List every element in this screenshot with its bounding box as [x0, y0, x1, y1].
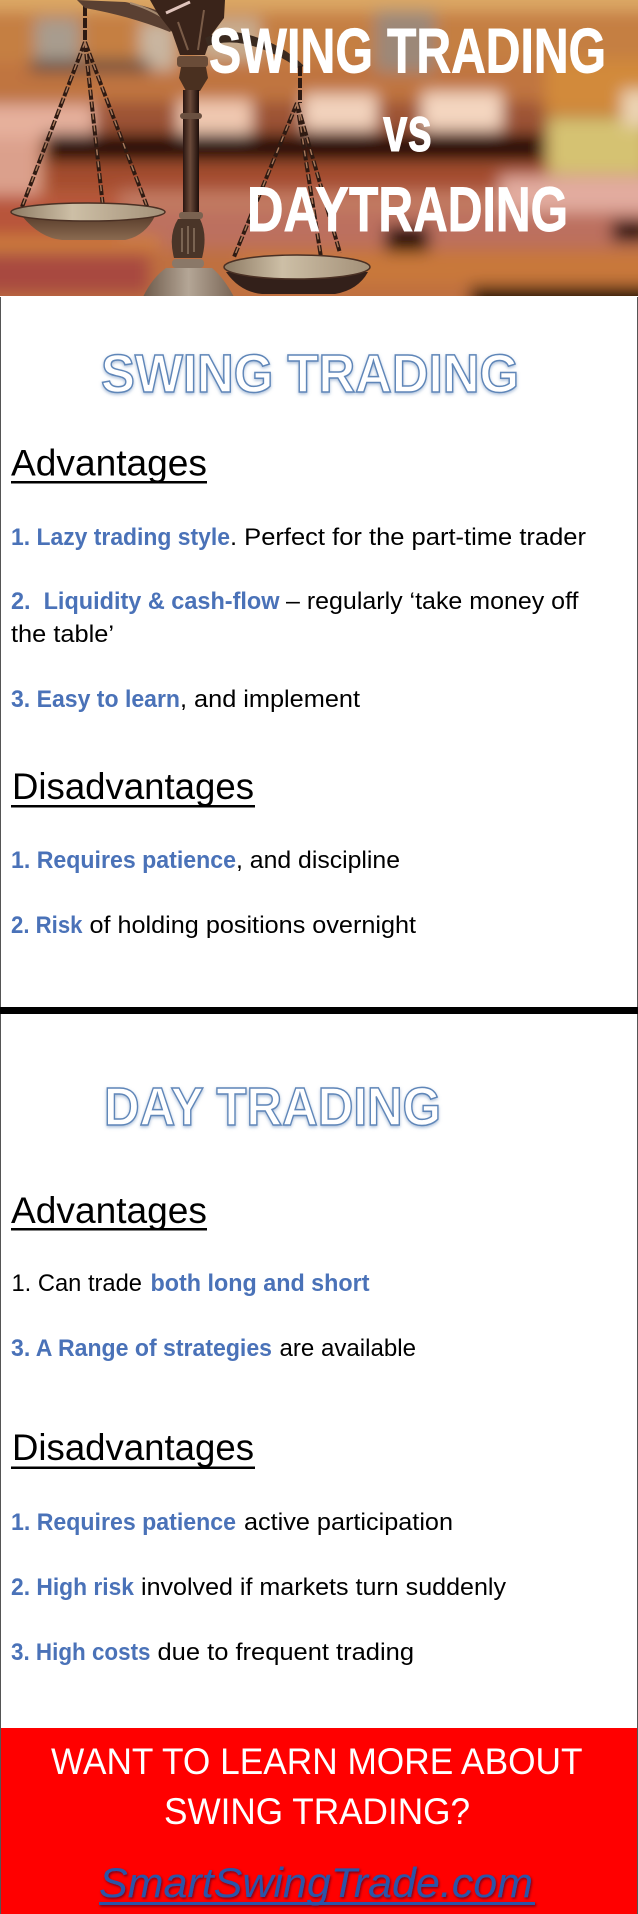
item: easy to learn: 3. Easy to learn [11, 686, 180, 713]
item: long and short: 1. Can trade [12, 1270, 142, 1297]
call to action text: WANT TO LEARN MORE ABOUT [51, 1741, 582, 1782]
item: high risk: 2. High risk [11, 1574, 135, 1601]
hero title [210, 28, 604, 232]
scale right chains [234, 66, 340, 270]
hero title: SWING [209, 16, 373, 86]
item: risk overnight: 2. Risk [11, 912, 83, 939]
item: requires patience: active participation [244, 1509, 453, 1536]
panel: call to action [0, 1728, 638, 1914]
website link: SmartSwingTrade.com [99, 1859, 533, 1906]
icon: scales of justice [11, 0, 370, 297]
item: high costs: 3. High costs [11, 1639, 150, 1666]
hero title: vs [383, 95, 432, 165]
heading: swing trading: SWING TRADING [101, 344, 519, 404]
panel: day trading [0, 1014, 638, 1728]
scale left chains [22, 6, 148, 209]
item: requires patience: , and discipline [236, 847, 400, 874]
heading: disadvantages: Disadvantages [12, 766, 254, 807]
item: risk overnight: of holding positions overnight [90, 912, 416, 939]
panel: swing trading [0, 297, 638, 1007]
item: lazy trading style: 1. Lazy trading style [11, 524, 230, 551]
item: requires patience: 1. Requires patience [11, 1509, 236, 1536]
item: easy to learn: , and implement [180, 686, 360, 713]
divider bar [0, 1007, 638, 1014]
hero title: DAY [247, 175, 349, 245]
heading: advantages: Advantages [11, 442, 207, 484]
heading: day trading: DAY TRADING [104, 1077, 441, 1137]
heading: advantages: Advantages [11, 1190, 207, 1231]
hero banner [0, 0, 638, 296]
item: lazy trading style: . Perfect for the part-time trader [230, 524, 586, 551]
item: requires patience: 1. Requires patience [11, 847, 236, 874]
scale centre column [77, 0, 234, 297]
item: liquidity and cash-flow: 2. Liquidity & cash-flow [11, 588, 280, 615]
item: high risk: involved if markets turn suddenly [141, 1574, 506, 1601]
heading: disadvantages: Disadvantages [12, 1427, 254, 1468]
item: liquidity and cash-flow [11, 588, 579, 648]
item: long and short: both long and short [150, 1270, 370, 1297]
hero blurred courtroom background [0, 0, 638, 296]
item: range of strategies: are available [280, 1335, 416, 1362]
call to action text [51, 1741, 582, 1832]
scale right pan [224, 255, 370, 294]
item: range of strategies: 3. A Range of strategies [11, 1335, 272, 1362]
hero title: TRADING [349, 175, 568, 245]
scale right beam [205, 32, 304, 68]
item: high costs: due to frequent trading [158, 1639, 414, 1666]
item: liquidity and cash-flow: – regularly ‘take money off [286, 588, 579, 615]
call to action text: SWING TRADING? [164, 1791, 470, 1832]
item: liquidity and cash-flow: the table’ [11, 621, 114, 648]
scale left pan [11, 203, 165, 240]
